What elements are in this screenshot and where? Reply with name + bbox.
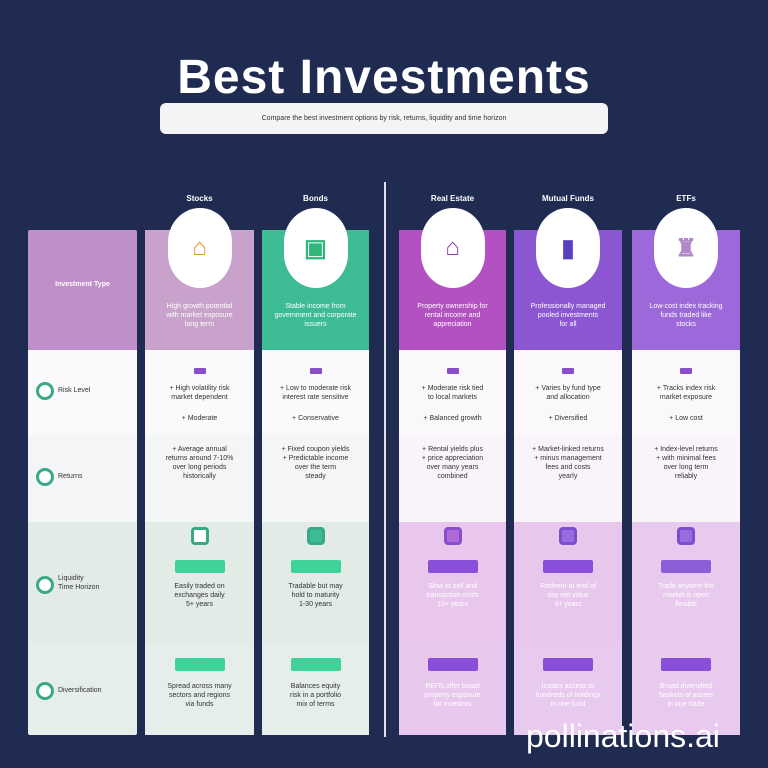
subtitle banner: Compare the best investment options by risk, returns, liquidity and time horizon — [262, 115, 506, 122]
panel: bonds: + Low to moderate risk — [280, 385, 351, 392]
text: ETFs — [676, 194, 696, 203]
panel: real estate: appreciation — [433, 321, 472, 328]
panel: stocks — [145, 194, 254, 735]
panel: real estate: Slow to sell and — [428, 583, 477, 590]
panel: stocks: + Moderate — [182, 415, 217, 422]
panel: ETFs: + Low cost — [669, 415, 703, 422]
title: Best Investments — [177, 51, 591, 104]
panel: mutual funds: Redeem at end of — [540, 583, 596, 590]
panel: ETFs: + Tracks index risk — [657, 385, 715, 392]
panel: ETFs — [632, 194, 740, 735]
panel: mutual funds: Instant access to — [542, 683, 594, 690]
panel: real estate — [399, 194, 506, 735]
panel: bonds: + Predictable income — [283, 455, 348, 462]
panel: stocks: Easily traded on — [174, 583, 225, 590]
panel: bonds: over the term — [295, 464, 336, 471]
panel: mutual funds: + Varies by fund type — [535, 385, 601, 392]
panel: bonds: mix of terms — [296, 701, 335, 708]
panel: mutual funds: for all — [559, 321, 577, 328]
panel: bonds: Balances equity — [291, 683, 340, 690]
panel: mutual funds: fees and costs — [545, 464, 591, 471]
panel: ETFs: market is open — [663, 592, 709, 599]
panel: ETFs: reliably — [675, 473, 697, 480]
text: Mutual Funds — [542, 194, 594, 203]
panel: ETFs: Broad diversified — [660, 683, 712, 690]
panel: real estate: + Balanced growth — [423, 415, 482, 422]
panel: bonds: + Fixed coupon yields — [282, 446, 349, 453]
panel: stocks: + Average annual — [172, 446, 227, 453]
panel: real estate: rental income and — [425, 312, 480, 319]
panel: stocks: High growth potential — [167, 303, 232, 310]
panel: stocks: sectors and regions — [169, 692, 230, 699]
panel: row labels column: Investment Type — [55, 281, 110, 288]
panel: stocks: via funds — [185, 701, 214, 708]
icon: stocks: ⌂ — [192, 234, 207, 261]
panel: stocks: exchanges daily — [174, 592, 225, 599]
panel: real estate: combined — [437, 473, 468, 480]
panel: bonds: risk in a portfolio — [290, 692, 341, 699]
panel: mutual funds — [514, 194, 622, 735]
icon: real estate: ⌂ — [445, 234, 460, 261]
panel: row labels column: Time Horizon — [58, 584, 99, 591]
panel: bonds: issuers — [304, 321, 327, 328]
panel: mutual funds: Professionally managed — [531, 303, 605, 310]
panel: bonds: Tradable but may — [288, 583, 343, 590]
panel: mutual funds: 3+ years — [554, 601, 582, 608]
panel: mutual funds: hundreds of holdings — [536, 692, 600, 699]
panel: bonds: + Conservative — [292, 415, 339, 422]
panel: mutual funds: and allocation — [546, 394, 590, 401]
panel: ETFs: + Index-level returns — [654, 446, 718, 453]
panel: real estate: 10+ years — [437, 601, 468, 608]
panel: row labels column — [28, 230, 137, 735]
panel: bonds: Stable income from — [285, 303, 346, 310]
icon: ETFs: ♜ — [675, 234, 697, 262]
icon: stocks — [168, 208, 232, 288]
panel: stocks: historically — [183, 473, 216, 480]
panel: real estate: property exposure — [424, 692, 481, 699]
panel: ETFs: in one trade — [668, 701, 704, 708]
panel: ETFs: Low-cost index tracking — [649, 303, 723, 310]
panel: stocks: returns around 7-10% — [166, 455, 233, 462]
panel: ETFs: funds traded like — [660, 312, 712, 319]
panel: real estate: for investors — [433, 701, 472, 708]
panel: mutual funds: pooled investments — [538, 312, 598, 319]
panel: bonds — [262, 194, 369, 735]
panel: bonds: government and corporate — [274, 312, 357, 319]
panel: stocks: 5+ years — [186, 601, 213, 608]
icon: ETFs — [654, 208, 718, 288]
icon: real estate — [420, 208, 484, 288]
panel: ETFs: baskets of assets — [659, 692, 713, 699]
panel: row labels column: Diversification — [58, 687, 102, 694]
panel: row labels column: Returns — [58, 473, 83, 480]
panel: bonds: hold to maturity — [292, 592, 339, 599]
panel: mutual funds: day net value — [547, 592, 589, 599]
panel: real estate: + Rental yields plus — [422, 446, 483, 453]
panel: ETFs: flexible — [675, 601, 697, 608]
panel: real estate: over many years — [427, 464, 478, 471]
icon: mutual funds: ▮ — [561, 234, 575, 262]
panel: mutual funds: + minus management — [534, 455, 602, 462]
panel: mutual funds: + Diversified — [549, 415, 587, 422]
panel: real estate: Property ownership for — [417, 303, 488, 310]
text: Stocks — [186, 194, 213, 203]
panel: row labels column: Risk Level — [58, 387, 90, 394]
panel: mutual funds: yearly — [559, 473, 577, 480]
panel: bonds: 1-30 years — [299, 601, 332, 608]
panel: stocks: over long periods — [173, 464, 226, 471]
icon: bonds: ▣ — [304, 234, 327, 262]
panel: real estate: + price appreciation — [422, 455, 483, 462]
panel: real estate: + Moderate risk tied — [422, 385, 483, 392]
panel: stocks: Spread across many — [167, 683, 232, 690]
panel: ETFs: market exposure — [660, 394, 712, 401]
panel: ETFs: + with minimal fees — [656, 455, 716, 462]
panel: ETFs: stocks — [676, 321, 696, 328]
panel: real estate: transaction costs — [426, 592, 479, 599]
panel: stocks: long term — [185, 321, 214, 328]
panel: row labels column: Liquidity — [58, 575, 84, 582]
panel: real estate: to local markets — [428, 394, 477, 401]
panel: bonds: interest rate sensitive — [282, 394, 349, 401]
panel: stocks: with market exposure — [166, 312, 233, 319]
icon: bonds — [284, 208, 348, 288]
watermark: pollinations.ai — [526, 718, 720, 754]
panel: stocks: market dependent — [171, 394, 228, 401]
panel: ETFs: Trade anytime the — [658, 583, 714, 590]
icon: mutual funds — [536, 208, 600, 288]
text: Real Estate — [431, 194, 474, 203]
text: Bonds — [303, 194, 328, 203]
panel: ETFs: over long term — [664, 464, 708, 471]
subtitle banner — [160, 103, 608, 134]
divider — [384, 182, 386, 737]
panel: mutual funds: in one fund — [551, 701, 585, 708]
panel: stocks: + High volatility risk — [169, 385, 230, 392]
panel: bonds: steady — [305, 473, 326, 480]
panel: real estate: REITs offer broad — [425, 683, 480, 690]
panel: mutual funds: + Market-linked returns — [532, 446, 604, 453]
